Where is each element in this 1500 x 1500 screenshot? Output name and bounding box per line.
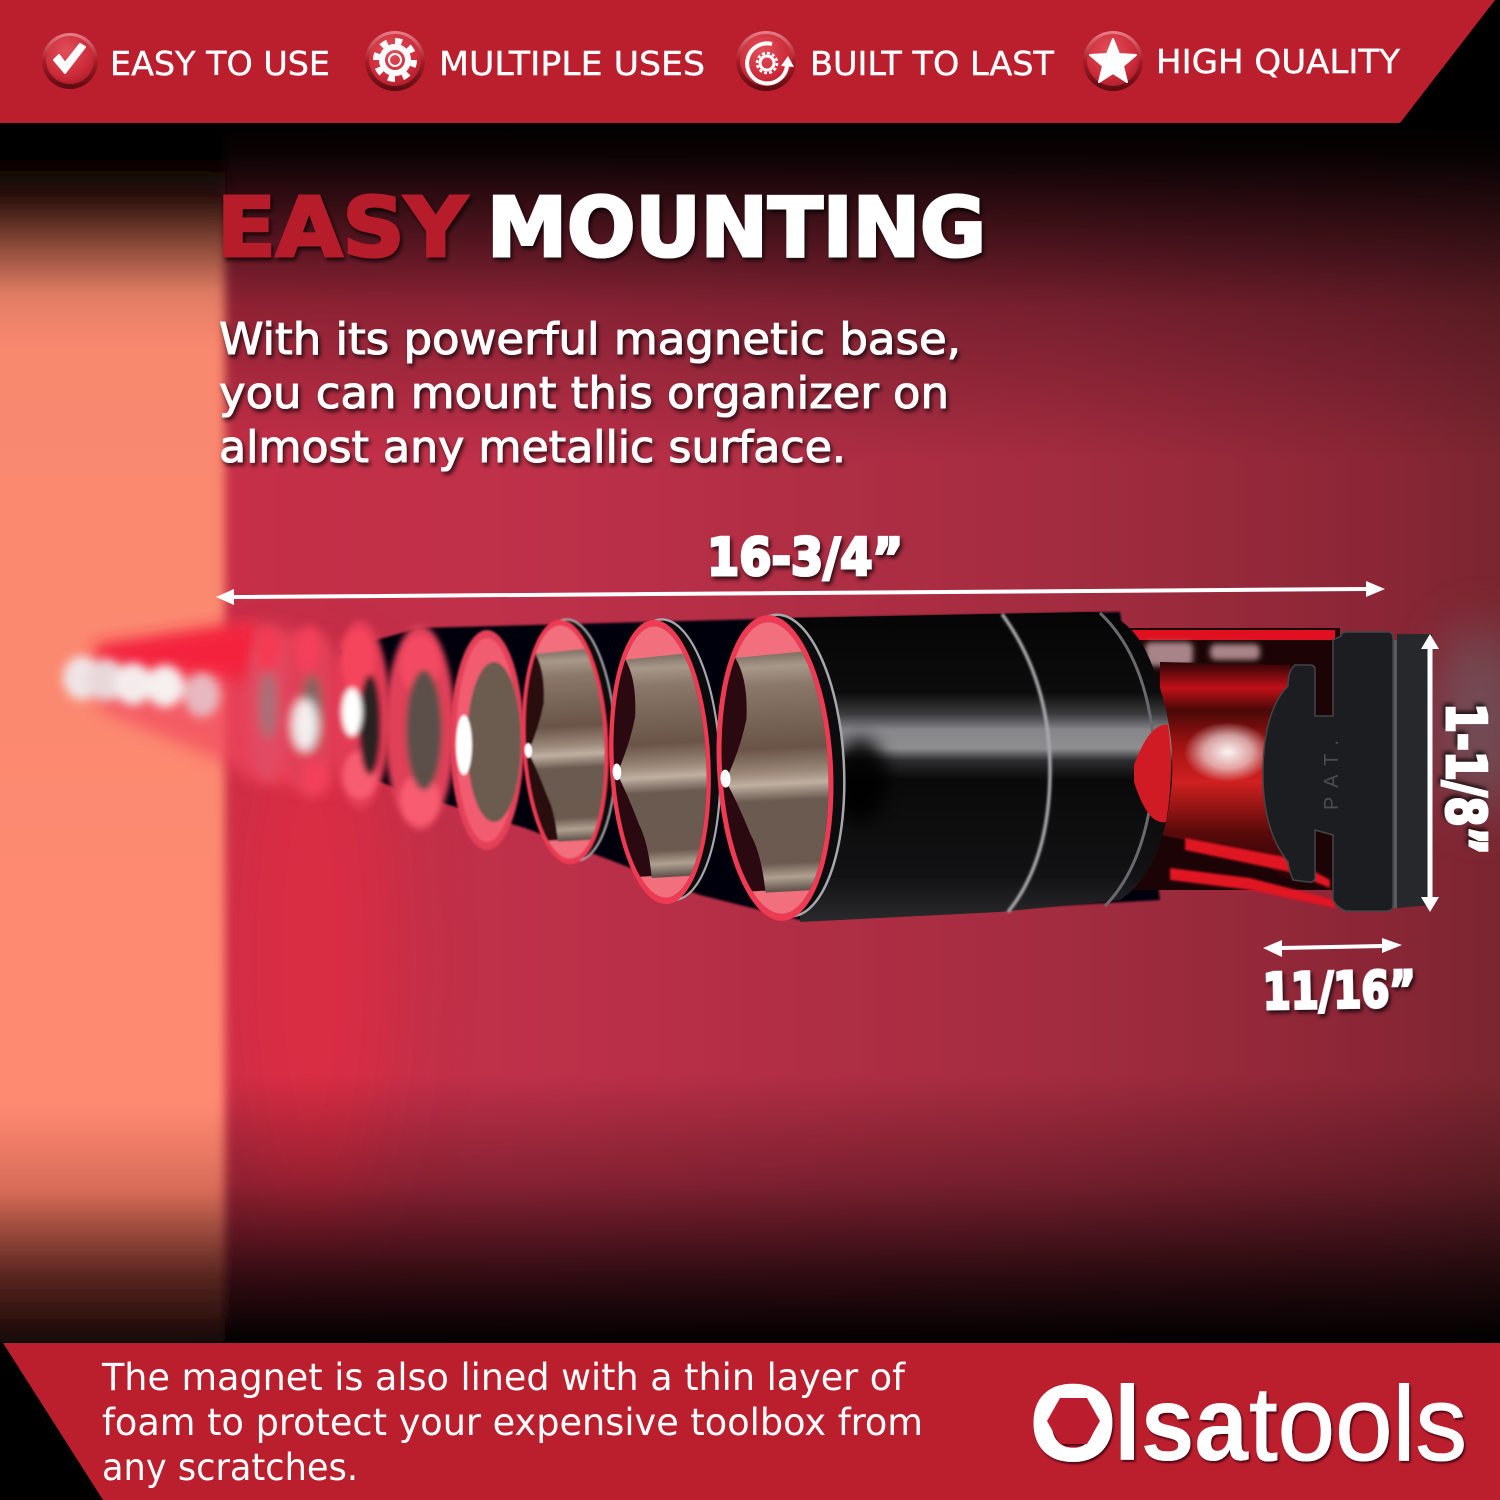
dimension: height bbox=[1421, 634, 1497, 912]
label: multiple uses: MULTIPLE USES bbox=[439, 44, 705, 83]
intro text block: With its powerful magnetic base, bbox=[219, 314, 961, 365]
intro text block bbox=[219, 314, 961, 473]
channel with red reflections bbox=[1125, 628, 1340, 908]
main socket body bbox=[790, 612, 1172, 922]
blurred far sockets bbox=[63, 622, 336, 798]
logo: Olsatools: tools bbox=[1249, 1365, 1467, 1483]
intro text block: you can mount this organizer on bbox=[219, 368, 949, 419]
title: EASY bbox=[217, 181, 469, 276]
main socket mouth bbox=[707, 612, 852, 924]
length label: 16-3/4” bbox=[707, 528, 903, 588]
dimension: depth bbox=[1262, 938, 1416, 1021]
label: built to last: BUILT TO LAST bbox=[810, 44, 1055, 83]
arrow: height bbox=[1421, 634, 1439, 912]
depth label: 11/16” bbox=[1262, 960, 1416, 1021]
socket 4 bbox=[601, 617, 727, 907]
red reflection on socket end bbox=[1134, 725, 1171, 822]
magnet foam strip bbox=[1393, 640, 1398, 908]
footer text: foam to protect your expensive toolbox from bbox=[102, 1401, 923, 1444]
top red band bbox=[1130, 630, 1335, 640]
lower streaks bbox=[1170, 838, 1335, 908]
wall highlight right bbox=[1435, 625, 1500, 815]
socket 5 bbox=[515, 617, 622, 867]
dark patch on body bbox=[832, 738, 888, 822]
bright highlight on cylinder bbox=[1184, 722, 1272, 782]
title bbox=[217, 181, 986, 276]
main socket end ring bbox=[1100, 613, 1155, 906]
socket 6 bbox=[450, 630, 524, 850]
footer text bbox=[101, 1356, 923, 1489]
arrow: length bbox=[216, 581, 1385, 605]
icon: gear bbox=[365, 31, 425, 91]
logo: Olsatools bbox=[1030, 1362, 1467, 1483]
footer text: any scratches. bbox=[102, 1446, 358, 1489]
footer text: The magnet is also lined with a thin layer of bbox=[101, 1356, 906, 1399]
socket 8 bbox=[330, 620, 390, 810]
red cylinder bbox=[1160, 662, 1290, 880]
T-shaped clip bbox=[1263, 632, 1393, 911]
magnet base bbox=[1397, 634, 1432, 908]
label: easy to use: EASY TO USE bbox=[110, 44, 330, 83]
icon: gear with refresh arrow bbox=[736, 31, 796, 91]
height label: 1-1/8” bbox=[1434, 703, 1497, 855]
logo: Olsatools: lsa bbox=[1114, 1365, 1249, 1483]
icon: star bbox=[1083, 31, 1143, 91]
clip PAT marking: PAT. bbox=[1321, 740, 1343, 810]
pale base blobs bbox=[1145, 642, 1260, 666]
icon: check bbox=[42, 33, 98, 89]
intro text block: almost any metallic surface. bbox=[219, 422, 846, 473]
header band bbox=[0, 0, 1495, 123]
label: high quality: HIGH QUALITY bbox=[1156, 42, 1401, 81]
title: MOUNTING bbox=[487, 181, 986, 276]
main socket collar ridge bbox=[1002, 614, 1050, 912]
socket 7 bbox=[385, 625, 455, 831]
logo: Olsatools: O bbox=[1030, 1362, 1116, 1483]
black rail behind sockets bbox=[340, 612, 1160, 920]
illustration: socket organizer rail bbox=[63, 612, 1432, 924]
arrow: depth bbox=[1263, 938, 1402, 957]
dimension: length bbox=[216, 528, 1385, 605]
footer band bbox=[3, 1343, 1500, 1500]
